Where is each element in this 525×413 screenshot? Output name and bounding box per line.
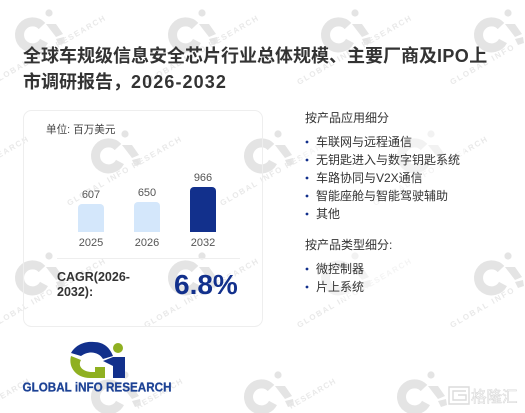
watermark pattern: GLOBAL INFO RESEARCH (372, 135, 489, 208)
logo: Global Info Research (22, 342, 172, 394)
text block: by application (305, 110, 460, 221)
list: applications: 车路协同与V2X通信 (316, 170, 423, 185)
list: product types: 微控制器 (316, 262, 364, 276)
bar chart: 607 (82, 189, 100, 201)
CAGR label: CAGR(2026- (57, 270, 130, 284)
list: applications: 智能座舱与智能驾驶辅助 (316, 188, 448, 203)
title: 市调研报告，2026-2032 (23, 71, 227, 92)
logo: Global Info Research: GLOBAL iNFO RESEARCH (22, 380, 172, 394)
watermark pattern: GLOBAL INFO (448, 43, 515, 87)
bar chart: 2032 (191, 237, 215, 249)
panel: market size card (24, 110, 262, 326)
watermark pattern: GLOBAL INFO RESEARCH (142, 14, 260, 87)
bar chart: 650 (138, 187, 156, 199)
watermark pattern: RESEARCH (288, 377, 337, 411)
watermark pattern: GLOBAL INFO RESEARCH (142, 257, 260, 330)
watermark pattern: GLOBAL INFO RESEARCH (296, 257, 413, 330)
list: applications: 无钥匙进入与数字钥匙系统 (316, 152, 460, 167)
list: applications (306, 134, 460, 221)
bar chart: 966 (194, 172, 212, 184)
text block: by product type (305, 238, 392, 294)
title (23, 45, 487, 92)
list: applications: 车联网与远程通信 (316, 134, 412, 149)
bar chart: 2026 (135, 237, 159, 249)
unit label: 单位: 百万美元 (46, 123, 116, 136)
text block: by application: 按产品应用细分 (305, 110, 389, 125)
bar chart: 2025 (79, 237, 103, 249)
CAGR label: 2032): (57, 285, 93, 299)
source watermark (449, 387, 518, 406)
CAGR value: 6.8% (174, 269, 238, 300)
text block: by product type: 按产品类型细分: (305, 238, 392, 252)
bar chart (78, 172, 216, 249)
title: 全球车规级信息安全芯片行业总体规模、主要厂商及IPO上 (23, 45, 487, 66)
source watermark: 格隆汇 (471, 388, 518, 406)
list: product types: 片上系统 (316, 280, 364, 294)
watermark pattern: GLOBAL INFO RESEARCH (296, 14, 413, 87)
list: product types (306, 262, 364, 294)
list: applications: 其他 (316, 207, 340, 221)
watermark pattern: GLOBAL INFO RESEARCH (66, 135, 183, 208)
watermark pattern: GLOBAL INFO (448, 286, 515, 330)
watermark pattern: RESEARCH (134, 377, 184, 411)
watermark pattern: GLOBAL INFO RESEARCH (218, 135, 336, 208)
